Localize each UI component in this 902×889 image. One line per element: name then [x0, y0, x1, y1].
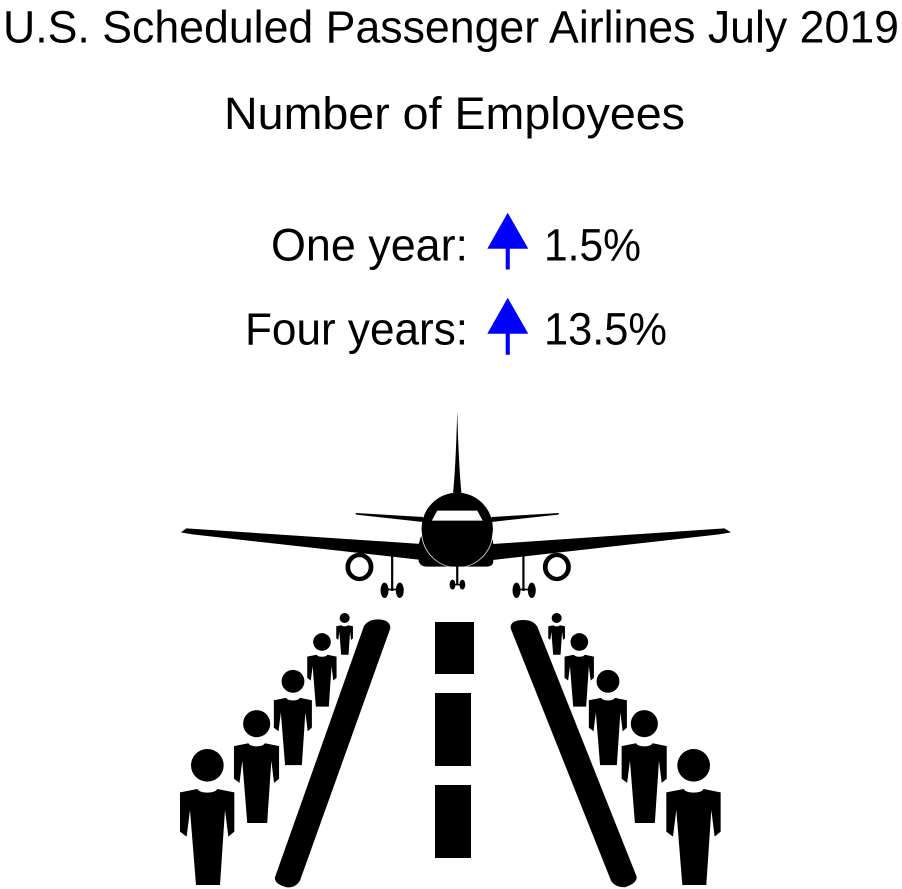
subtitle: Number of Employees [224, 88, 685, 139]
icon: blue up arrow [487, 298, 528, 355]
people: left row of employees [180, 613, 353, 885]
value: one year: 1.5% [544, 220, 641, 271]
people: right row of employees [548, 613, 721, 885]
label: one year: One year: [271, 220, 468, 271]
icon: airplane front view [181, 411, 731, 598]
runway: left edge line [275, 619, 390, 887]
value: four years: 13.5% [544, 304, 667, 354]
icon: blue up arrow [487, 213, 528, 270]
label: four years: Four years: [245, 304, 468, 354]
title: U.S. Scheduled Passenger Airlines July 2019 [3, 1, 899, 52]
stat: four year change [245, 298, 667, 355]
stat: one year change [271, 213, 641, 271]
runway: center dashes [435, 622, 474, 858]
runway: right edge line [511, 620, 637, 887]
